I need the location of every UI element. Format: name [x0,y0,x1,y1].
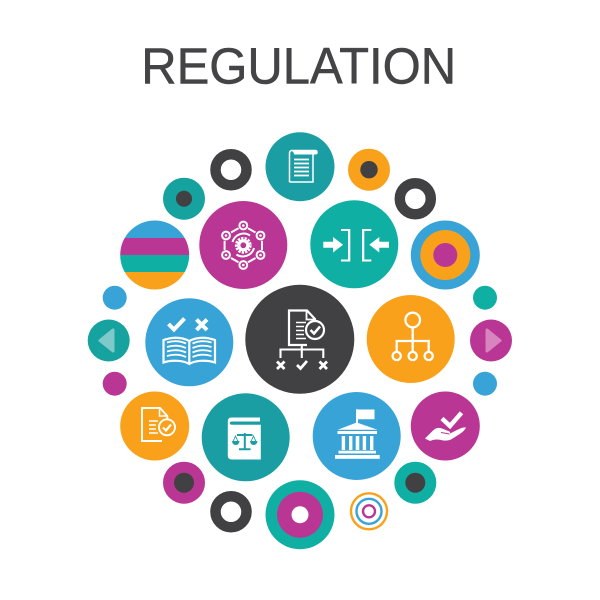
icon: converging arrows and brackets [323,229,389,262]
dot: magenta with dark centre [163,462,205,504]
circle: law book panel [202,393,290,481]
target: thin rings [351,493,387,529]
dot: teal with dark centre bottom right [394,462,436,504]
target: teal magenta white [266,480,334,549]
circle: open book panel [145,298,233,386]
icon: document with check [142,408,175,441]
circle: gear network panel [199,201,287,289]
nav button: left [88,320,130,362]
dot: teal with dark centre [163,178,205,220]
dot: blue left [103,286,127,310]
circle: central document decision tree [245,285,354,394]
ring: top right dark [400,183,431,214]
ring: top left dark [216,154,246,185]
icon: hierarchy [393,313,433,360]
circle: orange document check panel [120,392,189,460]
icon: hand with check [425,413,466,441]
icon: gear network [222,222,264,269]
striped circle [120,220,190,290]
circle: hand with check panel [411,392,480,460]
circle: hierarchy panel [367,295,455,383]
dot: teal right [473,286,497,310]
title: REGULATION [141,37,456,94]
icon: government building with flag [335,409,380,459]
ring: bottom left dark [216,496,246,527]
icon: left arrow [100,330,113,351]
dot: magenta left [103,372,127,396]
dot: orange with dark centre [348,149,390,191]
dot: blue right [473,372,497,396]
icon: document scroll [290,150,317,182]
icon: right arrow [487,330,500,351]
nav button: right [470,320,512,362]
icon: open book with check and cross [164,318,215,364]
circle: government building panel [313,392,401,480]
circle: document icon panel [266,132,334,201]
circle: arrows to brackets panel [310,200,398,288]
target: blue orange magenta [411,220,480,290]
icon: document with decision tree [277,310,327,369]
icon: law book with scales [228,418,261,460]
